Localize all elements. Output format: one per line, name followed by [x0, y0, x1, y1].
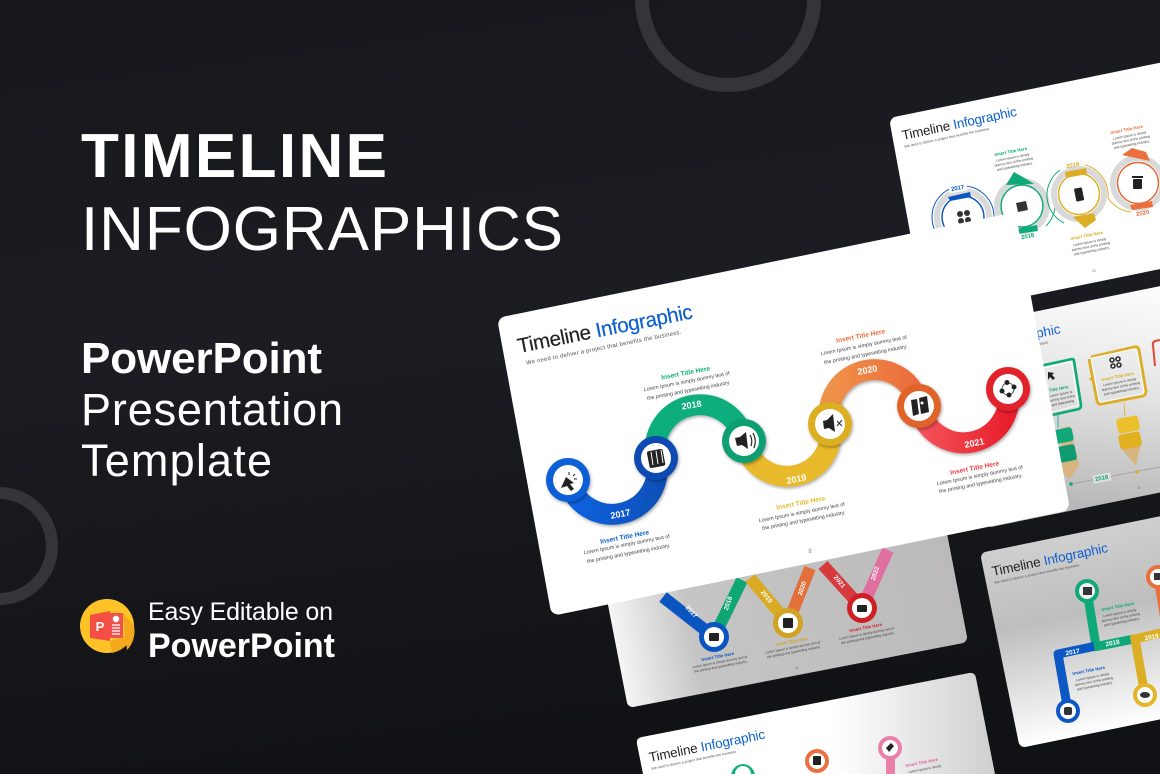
title	[81, 122, 563, 264]
bottom right text blocks: Lorem Ipsum is simply	[1076, 672, 1110, 682]
top slide text blocks: Lorem Ipsum is simply	[1113, 130, 1147, 141]
green box: and typesetting	[1051, 399, 1075, 407]
zigzag year labels: 2020	[797, 580, 808, 596]
top slide text blocks: dummy text of the printing	[994, 156, 1033, 168]
top slide text blocks: dummy text of the printing	[1111, 134, 1150, 146]
zigzag text blocks: 6	[796, 665, 799, 670]
bottom slide text block: Lorem Ipsum is simply	[908, 764, 942, 774]
bottom right heading: We need to deliver a project that benefits the business.	[994, 563, 1080, 585]
bottom right nodes	[1056, 565, 1160, 723]
pencil: green	[1048, 426, 1079, 479]
zigzag text blocks: the printing and typesetting industry.	[694, 659, 748, 674]
ribbon: 2021	[919, 389, 1009, 443]
text block: 2021: Insert Title Here	[950, 460, 1000, 477]
zigzag text blocks: Insert Title Here	[701, 651, 735, 662]
zigzag year labels: 2022	[870, 565, 881, 581]
ring: 2018: 2018	[1021, 233, 1036, 241]
year labels	[610, 363, 985, 521]
icon: PowerPoint badge	[80, 599, 135, 653]
bottom right text blocks: and typesetting industry.	[1077, 681, 1113, 691]
ribbon: 2018	[655, 405, 744, 458]
subtitle: PowerPoint	[81, 334, 322, 383]
bottom slide heading: Timeline Infographic	[648, 727, 767, 765]
zigzag year labels: 2019	[759, 589, 774, 605]
bottom right timeline	[1058, 577, 1160, 711]
green box	[1040, 359, 1081, 428]
badge text: PowerPoint	[148, 627, 335, 665]
node: mute	[808, 402, 852, 446]
text block: 2020: Lorem Ipsum is simply dummy text of	[820, 335, 908, 357]
bottom right years: 2019	[1144, 633, 1160, 642]
zigzag year labels: 2017	[684, 604, 699, 620]
bottom right text blocks	[1072, 601, 1140, 691]
bottom slide nodes	[731, 736, 902, 774]
zigzag text blocks	[692, 622, 895, 674]
red box fragment	[1153, 340, 1160, 366]
badge text	[148, 598, 335, 665]
text block: 2018: the printing and typesetting industry.	[647, 380, 731, 402]
text block: 2017	[583, 529, 671, 565]
bottom slide text block: Insert Title Here	[905, 757, 939, 768]
icon: four circles	[1110, 357, 1121, 368]
ring: 2017	[932, 181, 994, 248]
top slide text blocks: and typesetting industry.	[1114, 139, 1150, 150]
yellow box: and typesetting industry.	[1104, 386, 1140, 396]
bottom slide text block	[905, 757, 942, 774]
node: speaker	[722, 419, 766, 463]
pencil slide heading fragment: phic	[1035, 321, 1062, 341]
node: mixer	[634, 436, 678, 480]
title: TIMELINE	[81, 122, 387, 191]
text block: 2019: the printing and typesetting industry.	[762, 510, 846, 532]
pencil timeline axis: 3	[1138, 485, 1141, 490]
zigzag text blocks: Lorem Ipsum is simply dummy text of	[839, 626, 895, 641]
bottom right text blocks: dummy text of the printing	[1074, 676, 1113, 687]
green box: Title Here	[1048, 384, 1070, 393]
bottom right text blocks: dummy text of the printing	[1101, 612, 1140, 623]
ring: 2019	[1047, 162, 1108, 228]
year labels: 2018	[681, 399, 702, 412]
text block: 2017: Lorem Ipsum is simply dummy text of	[583, 534, 671, 556]
text block: 2018	[643, 365, 731, 402]
page number: 8	[808, 549, 812, 555]
node: network	[986, 367, 1030, 411]
panel: zigzag timeline slide	[590, 446, 968, 708]
zigzag year labels: 2021	[832, 574, 847, 590]
top slide text blocks	[994, 124, 1150, 273]
panel: bottom right slide	[980, 484, 1160, 748]
panel: bottom slide	[637, 673, 995, 774]
node: map	[897, 384, 941, 428]
top slide text blocks: and typesetting industry.	[997, 161, 1033, 172]
ring: 2020: 2020	[1136, 210, 1151, 218]
zigzag text blocks: the printing and typesetting industry.	[767, 645, 821, 659]
text block: 2021: Lorem Ipsum is simply dummy text of	[936, 465, 1024, 487]
top slide text blocks: Lorem Ipsum is simply	[996, 152, 1030, 163]
badge text: Easy Editable on	[148, 598, 333, 626]
subtitle	[81, 334, 343, 486]
bottom right text blocks: Lorem Ipsum is simply	[1103, 608, 1137, 618]
ring: 2017: 2017	[951, 185, 966, 193]
zigzag bars	[663, 550, 888, 637]
zigzag year labels	[684, 565, 881, 620]
top slide text blocks: Insert Title Here	[1110, 124, 1144, 135]
year labels: 2021	[964, 436, 985, 450]
yellow box: dummy text of the printing	[1101, 381, 1140, 392]
zigzag text blocks: Lorem Ipsum is simply dummy text of	[692, 655, 748, 669]
bottom right text blocks: and typesetting industry.	[1104, 617, 1140, 627]
bottom right text blocks: Insert Title Here	[1101, 601, 1135, 612]
text block: 2020	[820, 328, 908, 366]
zigzag text blocks: Lorem Ipsum is simply dummy text of	[765, 640, 821, 655]
panel: main timeline slide	[497, 212, 1070, 616]
ring: 2019: 2019	[1066, 162, 1081, 170]
zigzag year labels: 2018	[723, 595, 734, 611]
ring: 2018	[997, 172, 1055, 241]
text block: 2021: the printing and typesetting industry.	[939, 473, 1023, 495]
yellow box: Insert Title Here	[1101, 371, 1135, 382]
year labels: 2019	[786, 472, 807, 486]
top slide heading: We need to deliver a project that benefits the business.	[904, 127, 990, 149]
green box: dummy text of the	[1048, 394, 1076, 403]
green box: Lorem Ipsum is	[1049, 390, 1073, 398]
text block: 2019: Insert Title Here	[776, 495, 826, 512]
zigzag text blocks: Insert Title Here	[849, 622, 883, 633]
text block: 2017: Insert Title Here	[600, 529, 650, 546]
text block: 2017: the printing and typesetting industry.	[587, 543, 671, 565]
title: INFOGRAPHICS	[81, 195, 563, 264]
yellow box	[1089, 347, 1146, 416]
pencil timeline axis: 2018	[1095, 475, 1110, 483]
bottom right years: 2017	[1065, 648, 1081, 657]
top slide text blocks: Lorem Ipsum is simply	[1073, 237, 1107, 247]
text block: 2018: Lorem Ipsum is simply dummy text of	[643, 371, 731, 393]
decorative ring: left	[0, 493, 52, 599]
top slide text blocks: 20	[1092, 268, 1097, 273]
ribbon: 2019	[744, 424, 831, 476]
zigzag nodes	[699, 593, 877, 652]
top slide text blocks: Insert Title Here	[994, 146, 1028, 157]
main heading: We need to deliver a project that benefits the business.	[526, 330, 682, 367]
pencil: yellow	[1116, 415, 1142, 466]
year labels: 2020	[857, 363, 878, 377]
text block: 2019	[758, 495, 846, 532]
text block: 2020: the printing and typesetting industry.	[824, 344, 908, 366]
icon: PowerPoint badge: P	[96, 619, 105, 634]
ring: 2020	[1108, 148, 1160, 218]
yellow box: Lorem Ipsum is simply	[1103, 377, 1137, 387]
year labels: 2017	[610, 507, 631, 521]
bottom right years	[1065, 633, 1160, 657]
bottom slide heading: We need to deliver a project that benefits the business.	[651, 749, 737, 771]
pencil slide heading fragment: iness.	[1039, 340, 1049, 346]
top slide heading: Timeline Infographic	[901, 104, 1018, 143]
text block: 2020: Insert Title Here	[836, 328, 886, 345]
top slide text blocks: and typesetting industry.	[1074, 246, 1110, 256]
top slide text blocks: dummy text of the printing	[1071, 241, 1110, 252]
top slide text blocks: Insert Title Here	[1070, 230, 1104, 241]
ribbon: 2020	[829, 370, 919, 424]
node: cursor	[546, 458, 590, 502]
bottom right heading: Timeline Infographic	[991, 540, 1109, 579]
subtitle: Presentation	[81, 384, 343, 435]
bottom right years: 2018	[1105, 639, 1121, 648]
subtitle: Template	[81, 435, 272, 486]
panel: pencil timeline slide	[950, 269, 1160, 528]
zigzag text blocks: Insert Title Here	[775, 636, 809, 647]
ribbon: 2017	[568, 458, 657, 514]
text block: 2021	[936, 460, 1024, 495]
pencil timeline axis	[1069, 467, 1160, 490]
main heading: Timeline Infographic	[515, 300, 695, 358]
decorative ring: top	[642, 0, 814, 85]
zigzag text blocks: the printing and typesetting industry.	[841, 631, 895, 645]
text block: 2019: Lorem Ipsum is simply dummy text of	[758, 502, 846, 524]
panel: top right slide	[889, 46, 1160, 317]
bottom right text blocks: Insert Title Here	[1072, 665, 1106, 676]
text block: 2018: Insert Title Here	[661, 365, 711, 382]
